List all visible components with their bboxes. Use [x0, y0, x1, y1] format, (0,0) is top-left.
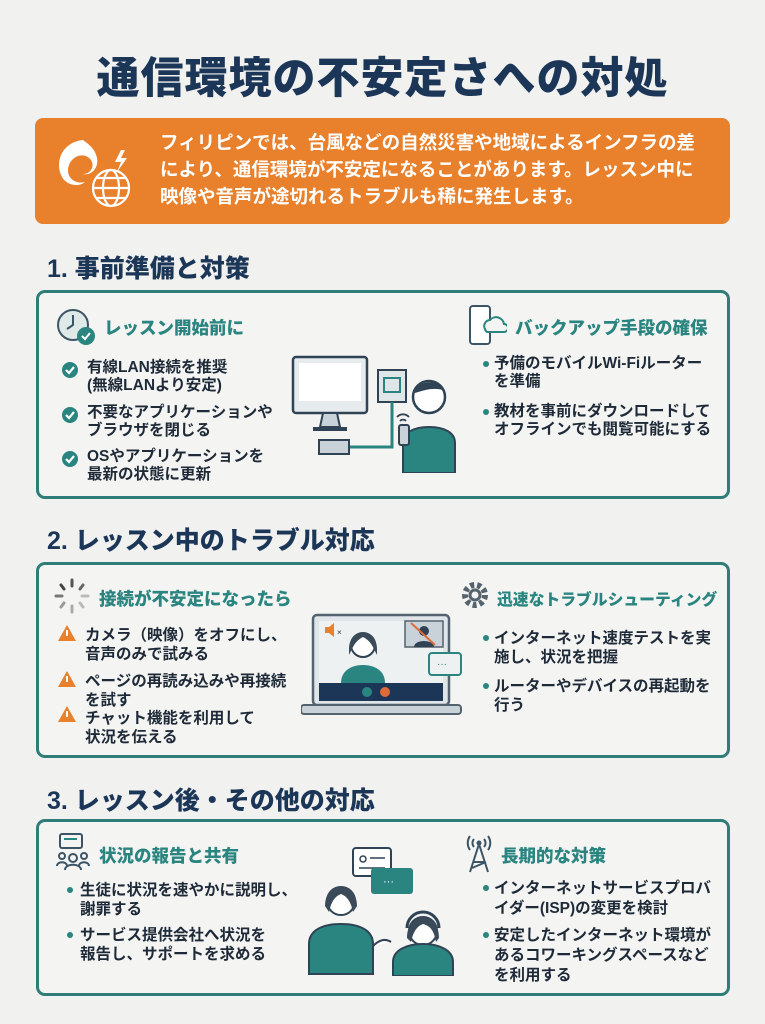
icon: clock check [57, 309, 95, 345]
bullets: report: 生徒に状況を速やかに説明し、 [80, 882, 297, 899]
bullets: backup [483, 354, 711, 438]
intro callout: フィリピンでは、台風などの自然災害や地域によるインフラの差 [160, 132, 695, 153]
icon: gear [462, 582, 488, 608]
checklist: OSやアプリケーションを [87, 448, 264, 465]
bullets: long term: イダー(ISP)の変更を検討 [494, 900, 668, 917]
illustration: laptop video call: ··· [437, 659, 447, 670]
bullets: troubleshooting: 行う [494, 697, 525, 714]
panel: section 1 [36, 290, 730, 499]
icon: antenna tower [466, 835, 492, 872]
bullets: long term: インターネットサービスプロバ [494, 880, 711, 897]
subheading: unstable: 接続が不安定になったら [99, 589, 292, 609]
bullets: report: 謝罪する [80, 901, 142, 918]
illustration: support staff: ··· [383, 876, 394, 888]
bullets: report: サービス提供会社へ状況を [80, 927, 266, 944]
subheading: report: 状況の報告と共有 [99, 846, 239, 866]
warning list [58, 625, 287, 746]
panel: section 2 [36, 562, 730, 758]
checklist [62, 358, 273, 483]
icon: people chat [56, 833, 90, 870]
heading: section 1: 1. 事前準備と対策 [47, 255, 250, 283]
icon: phone cloud [469, 305, 507, 345]
illustration: desktop and person [292, 356, 456, 473]
icon: typhoon and globe [59, 140, 130, 208]
heading: section 3: 3. レッスン後・その他の対応 [47, 787, 375, 815]
subheading: troubleshooting: 迅速なトラブルシューティング [497, 592, 717, 609]
heading: section 2: 2. レッスン中のトラブル対応 [47, 527, 375, 555]
bullets: backup: オフラインでも閲覧可能にする [494, 421, 711, 438]
subheading: long term: 長期的な対策 [501, 846, 606, 866]
bullets: backup: を準備 [494, 373, 541, 390]
illustration: support staff [308, 847, 454, 976]
panel: section 3 [36, 819, 730, 996]
warning list: 音声のみで試みる [85, 646, 209, 663]
illustration: laptop video call [301, 614, 462, 715]
bullets: long term: あるコワーキングスペースなど [494, 947, 709, 964]
bullets: long term: を利用する [494, 967, 572, 984]
subheading: backup: バックアップ手段の確保 [515, 318, 708, 338]
checklist: 最新の状態に更新 [87, 466, 211, 483]
bullets: troubleshooting: インターネット速度テストを実 [494, 630, 711, 647]
subheading: before lesson: レッスン開始前に [104, 318, 244, 338]
illustration: laptop video call: × [337, 628, 342, 637]
warning list: 状況を伝える [85, 729, 178, 746]
bullets: report: 報告し、サポートを求める [80, 946, 266, 963]
bullets: long term: 安定したインターネット環境が [494, 927, 711, 944]
intro callout: により、通信環境が不安定になることがあります。レッスン中に [160, 159, 694, 180]
bullets: long term [483, 880, 711, 984]
icon: loading spinner [54, 578, 90, 614]
checklist: (無線LANより安定) [87, 377, 222, 394]
title: 通信環境の不安定さへの対処 [96, 55, 668, 103]
warning list: ページの再読み込みや再接続 [85, 673, 286, 690]
bullets: backup: 予備のモバイルWi-Fiルーター [494, 355, 702, 372]
bullets: troubleshooting: 施し、状況を把握 [494, 649, 618, 666]
checklist: ブラウザを閉じる [87, 422, 211, 439]
bullets: troubleshooting: ルーターやデバイスの再起動を [494, 678, 711, 695]
checklist: 不要なアプリケーションや [87, 404, 273, 421]
warning list: カメラ（映像）をオフにし、 [85, 627, 287, 644]
checklist: 有線LAN接続を推奨 [87, 359, 227, 376]
intro callout: 映像や音声が途切れるトラブルも稀に発生します。 [160, 186, 584, 207]
bullets: troubleshooting [483, 630, 711, 714]
warning list: を試す [85, 692, 132, 709]
bullets: report [67, 882, 297, 963]
warning list: チャット機能を利用して [85, 710, 255, 727]
intro callout [35, 118, 730, 224]
bullets: backup: 教材を事前にダウンロードして [494, 403, 711, 420]
